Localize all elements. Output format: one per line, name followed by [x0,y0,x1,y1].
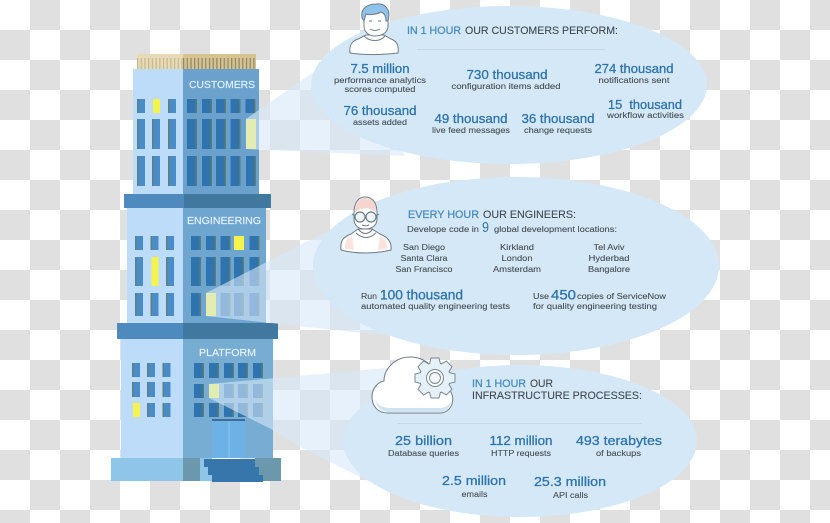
subheading: 9 [482,219,489,236]
stat: 2.5 million [442,473,506,499]
heading [407,25,618,37]
cornice [124,194,271,208]
stat: 49 thousand [432,111,511,135]
building [111,54,281,482]
stat: 493 terabytes: 493 terabytes [576,433,663,448]
stat: 49 thousand: 49 thousand [434,111,508,126]
heading: IN 1 HOUR [472,378,526,390]
heading: INFRASTRUCTURE PROCESSES: [472,390,642,402]
locations column 1: San Diego [403,242,445,252]
locations column 1 [396,242,453,274]
heading: OUR [530,378,553,390]
stat: 76 thousand [344,103,416,127]
ellipse background [313,177,719,355]
stat: 2.5 million: 2.5 million [442,473,506,488]
stat: 493 terabytes [576,433,663,458]
stat: 25.3 million: 25.3 million [534,474,606,489]
stat: 25 billion: Database queries [388,448,460,458]
locations column 3: Hyderbad [588,253,630,263]
stat: 100 thousand tests [361,288,511,311]
stat: 76 thousand: 76 thousand [344,103,416,118]
heading: IN 1 HOUR [407,25,461,37]
stat: 25 billion [388,433,460,458]
locations column 2 [493,242,541,274]
stat: 7.5 million: scores computed [344,84,416,94]
stat: 100 thousand tests: automated quality engineering tests [361,301,511,311]
stat: 274 thousand: 274 thousand [594,61,674,76]
stat: 112 million: HTTP requests [491,448,552,458]
stat: 493 terabytes: of backups [596,448,642,458]
stat: 36 thousand [522,111,594,135]
stat: 100 thousand tests: Run [361,291,377,301]
stat: 112 million: 112 million [490,433,552,448]
stat: 7.5 million [334,61,427,94]
door [212,419,245,458]
stat: 7.5 million: performance analytics [334,75,427,85]
building labels: PLATFORM [199,348,256,359]
stat: 450 copies: Use [533,291,549,301]
locations column 1: San Francisco [396,264,453,274]
floor: platform [121,339,273,458]
locations column 3: Tel Aviv [594,242,625,252]
stat: 450 copies: copies of ServiceNow [577,291,667,301]
heading [408,209,576,221]
panel: infrastructure [343,357,697,517]
locations column 2: London [502,253,533,263]
stat: 450 copies [533,288,667,311]
icon: customer person [350,4,398,54]
stat: 730 thousand: 730 thousand [466,67,548,82]
floor: engineering [127,208,266,323]
locations column 2: Amsterdam [493,264,541,274]
stat: 450 copies: 450 [551,288,576,302]
icon: engineer person [341,197,391,253]
panel: customers [311,4,707,164]
locations column 2: Kirkland [500,242,534,252]
subheading [407,219,617,236]
stat: 25 billion: 25 billion [395,433,452,448]
stat: 112 million [490,433,552,458]
locations column 1: Santa Clara [400,253,448,263]
stat: 274 thousand: notifications sent [598,75,670,85]
stat: 36 thousand: change requests [524,125,593,135]
stat: 15 thousand [606,97,685,120]
building labels [187,80,261,359]
stat: 450 copies: for quality engineering testing [533,301,657,311]
heading: EVERY HOUR [408,209,479,221]
heading: OUR ENGINEERS: [483,209,576,221]
heading: OUR CUSTOMERS PERFORM: [465,25,618,37]
stat: 100 thousand tests: 100 thousand [380,288,463,302]
panel: engineers [313,177,719,355]
stat: 25.3 million: API calls [553,490,589,500]
stat: 730 thousand [452,67,561,91]
stat: 15 thousand: 15 thousand [608,97,682,112]
subheading: global development locations: [494,224,617,234]
stat: 15 thousand: workflow activities [606,110,685,120]
cornice [117,323,278,339]
light beams [206,50,440,482]
stat: 730 thousand: configuration items added [452,81,561,91]
building labels: CUSTOMERS [189,80,255,91]
roof [137,54,256,69]
ellipse background [311,6,707,164]
stat: 274 thousand [594,61,674,85]
ellipse background [343,365,697,517]
stat: 36 thousand: 36 thousand [522,111,594,126]
icon: cloud with gear [372,357,455,413]
stat: 7.5 million: 7.5 million [350,61,410,76]
stat: 49 thousand: live feed messages [432,125,511,135]
subheading: Develope code in [407,224,479,234]
floor: customers [133,69,259,194]
base and steps [111,458,281,482]
locations column 3: Bangalore [588,264,630,274]
locations column 3 [588,242,630,274]
heading [472,378,642,402]
stat: 25.3 million [534,474,606,500]
building labels: ENGINEERING [187,216,261,227]
stat: 76 thousand: assets added [353,117,407,127]
stat: 2.5 million: emails [462,489,488,499]
